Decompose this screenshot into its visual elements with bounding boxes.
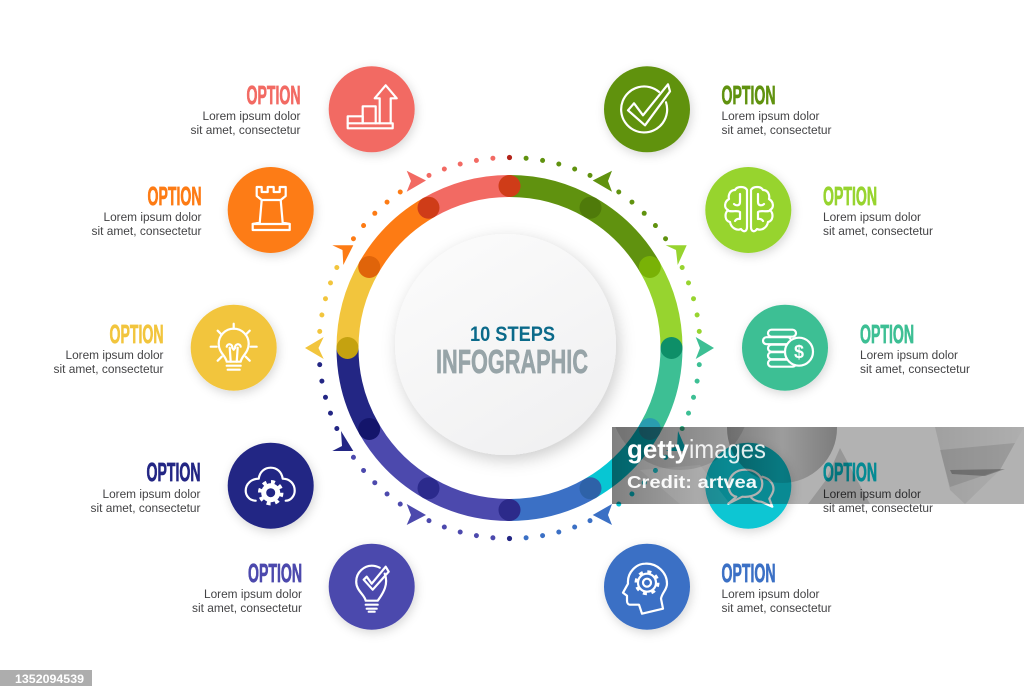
body text: Lorem ipsum dolor	[823, 487, 921, 501]
body text: Lorem ipsum dolor	[66, 348, 164, 362]
icon: growth chart	[348, 85, 397, 128]
option: green	[604, 66, 832, 152]
ring nodes	[336, 175, 682, 521]
heading: OPTION	[823, 457, 877, 487]
icon: brain	[725, 187, 773, 231]
icon: cloud gear	[246, 468, 295, 504]
body text: sit amet, consectetur	[823, 224, 933, 238]
image id label	[0, 670, 92, 686]
option: purple	[192, 544, 415, 630]
main ring	[348, 186, 672, 510]
option: yellow	[54, 305, 277, 391]
watermark: credit: Credit: artvea	[627, 472, 757, 492]
option: orange	[92, 167, 314, 253]
icon: bulb with check	[356, 566, 389, 612]
watermark: images: images	[689, 434, 766, 464]
heading: OPTION	[146, 457, 200, 487]
watermark: getty: getty	[627, 434, 690, 464]
icon: coins: $	[794, 342, 804, 362]
image id label: 1352094539	[15, 672, 84, 686]
body text: sit amet, consectetur	[722, 123, 832, 137]
body text: Lorem ipsum dolor	[202, 109, 300, 123]
option: lime	[705, 167, 933, 253]
body text: sit amet, consectetur	[823, 501, 933, 515]
icon: head with gear	[623, 564, 667, 614]
heading: OPTION	[722, 558, 776, 588]
body text: sit amet, consectetur	[722, 601, 832, 615]
body text: sit amet, consectetur	[90, 501, 200, 515]
title: infographic: INFOGRAPHIC	[436, 344, 588, 381]
body text: Lorem ipsum dolor	[102, 487, 200, 501]
heading: OPTION	[246, 80, 300, 110]
icon: check mark	[621, 84, 670, 132]
heading: OPTION	[248, 558, 302, 588]
body text: Lorem ipsum dolor	[823, 210, 921, 224]
title: 10 steps: 10 STEPS	[470, 323, 555, 346]
icon: light bulb	[211, 324, 257, 370]
body text: sit amet, consectetur	[860, 362, 970, 376]
icon: rook	[253, 187, 290, 230]
heading: OPTION	[110, 319, 164, 349]
body text: sit amet, consectetur	[192, 601, 302, 615]
heading: OPTION	[823, 181, 877, 211]
option: teal	[742, 305, 970, 391]
body text: Lorem ipsum dolor	[860, 348, 958, 362]
watermark band	[612, 427, 1024, 504]
option: coral	[190, 66, 415, 152]
heading: OPTION	[148, 181, 202, 211]
icon: coins	[763, 330, 813, 367]
body text: Lorem ipsum dolor	[722, 587, 820, 601]
dotted outer ring	[317, 155, 702, 541]
heading: OPTION	[722, 80, 776, 110]
icon: speech bubbles	[728, 470, 773, 507]
body text: sit amet, consectetur	[92, 224, 202, 238]
body text: sit amet, consectetur	[190, 123, 300, 137]
direction arrows	[305, 171, 714, 525]
option: blue	[604, 544, 832, 630]
centre disc	[395, 234, 616, 455]
option: navy	[90, 443, 314, 529]
body text: Lorem ipsum dolor	[722, 109, 820, 123]
body text: sit amet, consectetur	[54, 362, 164, 376]
heading: OPTION	[860, 319, 914, 349]
body text: Lorem ipsum dolor	[204, 587, 302, 601]
body text: Lorem ipsum dolor	[104, 210, 202, 224]
option: cyan	[705, 443, 933, 529]
